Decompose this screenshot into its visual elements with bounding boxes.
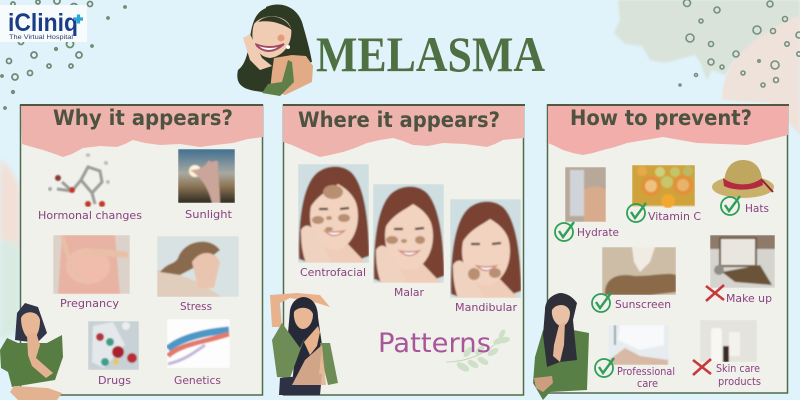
panel: where it appears (283, 105, 525, 395)
photo: mandibular pattern (450, 199, 521, 298)
logo: iCliniq: iCliniq (8, 9, 78, 37)
photo: make up (710, 235, 775, 288)
pink torn header (548, 105, 788, 155)
dot pattern top right (679, 0, 800, 87)
label: Drugs (98, 374, 131, 387)
panel: why it appears (20, 105, 263, 395)
label: Skin care (716, 362, 760, 375)
photo: malar pattern (373, 184, 444, 283)
photo: professional care (608, 325, 669, 365)
cross: make up (706, 285, 724, 301)
label: care (637, 377, 658, 390)
icon: hat (712, 160, 774, 198)
panel: how to prevent (547, 105, 789, 393)
illustration: smiling woman (237, 5, 313, 96)
check: hats (721, 196, 740, 215)
check: professional care (595, 358, 614, 377)
title: MELASMA (316, 26, 545, 82)
label: products (718, 375, 761, 388)
label: Genetics (174, 374, 221, 387)
heading: Why it appears? (53, 106, 233, 130)
panel background (20, 105, 262, 395)
label: Mandibular (455, 301, 517, 314)
label: Stress (180, 300, 212, 313)
watercolor blobs left (0, 160, 20, 340)
illustration: thinking woman (0, 303, 63, 400)
illustration: woman touching face (533, 293, 589, 400)
label: Make up (726, 292, 772, 305)
dot pattern top left (1, 0, 126, 109)
heading: Where it appears? (298, 108, 500, 132)
top border (283, 104, 525, 106)
cross: skin care products (693, 359, 711, 375)
check: hydrate (555, 222, 574, 241)
logo: iCliniq: The Virtual Hospital (9, 34, 74, 41)
photo: skin care products (700, 320, 757, 362)
label: Sunlight (185, 208, 233, 221)
check: sunscreen (592, 293, 611, 312)
label: Centrofacial (300, 266, 366, 279)
pink torn header (283, 105, 524, 157)
label: Vitamin C (648, 210, 701, 223)
label: Hormonal changes (38, 209, 142, 222)
photo: sunlight (178, 149, 235, 203)
photo: stress (157, 236, 239, 297)
photo: pregnancy (53, 235, 130, 294)
watercolor blobs top right (614, 0, 800, 135)
label: Sunscreen (615, 298, 671, 311)
label: Hydrate (577, 226, 619, 239)
label: Malar (394, 286, 424, 299)
icon: molecule (48, 153, 110, 207)
label: Professional (617, 365, 675, 378)
label: Pregnancy (60, 297, 119, 310)
panel background (284, 105, 524, 395)
panel background (548, 105, 788, 393)
photo: vitamin C (632, 165, 695, 208)
photo: hydrate (565, 167, 606, 222)
illustration: woman with raised arm (270, 293, 338, 395)
photo: centrofacial pattern (298, 164, 369, 263)
patterns label: Patterns (378, 328, 491, 359)
logo: iCliniq (0, 5, 87, 42)
photo: drugs (88, 321, 139, 370)
top border (20, 104, 263, 106)
photo: genetics (167, 319, 230, 368)
photo: sunscreen (602, 247, 676, 295)
check: vitamin C (627, 203, 646, 222)
leaf branch (446, 328, 510, 374)
top border (547, 104, 789, 106)
pink torn header (21, 105, 263, 157)
heading: How to prevent? (570, 106, 752, 130)
label: Hats (745, 202, 769, 215)
